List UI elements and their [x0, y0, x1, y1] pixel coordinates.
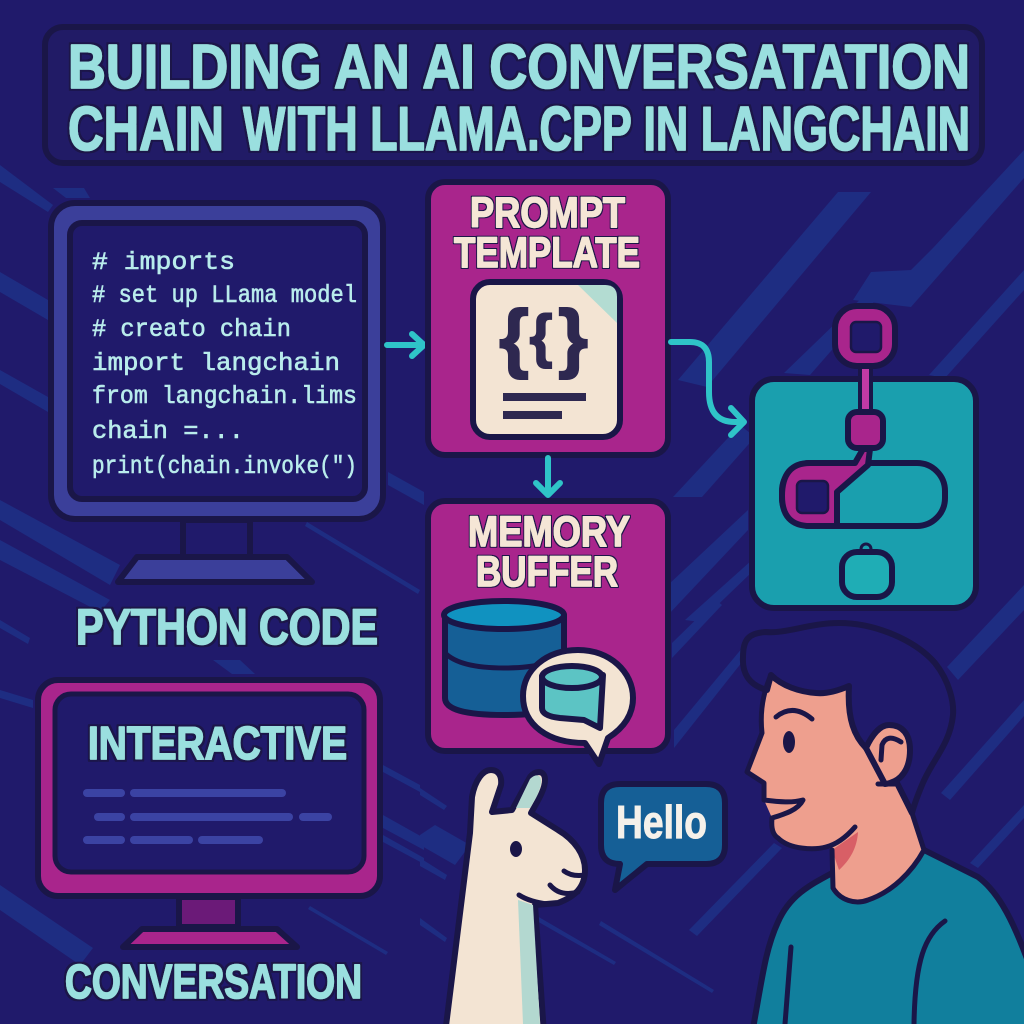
right ear — [516, 775, 541, 808]
code screen: # imports — [92, 248, 235, 277]
monitor stand — [118, 520, 312, 582]
label: conversation: CONVERSATION — [65, 956, 362, 1009]
monitor bezel — [51, 203, 383, 519]
hair — [743, 623, 953, 813]
speech bubble: hello — [601, 784, 725, 890]
face outline — [747, 675, 924, 902]
neck and face — [747, 675, 924, 902]
icon: template document — [473, 282, 620, 437]
heading: memory buffer — [468, 508, 630, 596]
chain node: small — [842, 544, 892, 597]
screen — [55, 694, 364, 872]
code screen: chain =... — [92, 417, 244, 446]
connector — [860, 366, 871, 412]
speech bubble: hello: Hello — [616, 796, 707, 848]
chain node: top — [835, 306, 895, 366]
screen: INTERACTIVE — [88, 717, 347, 769]
code screen: # set up LLama model — [92, 281, 357, 310]
panel: python code monitor — [51, 203, 383, 582]
ear detail — [878, 738, 901, 784]
arrow: code to prompt — [387, 334, 424, 356]
panel: memory buffer — [428, 501, 668, 764]
panel: interactive conversation monitor — [38, 680, 380, 947]
heading: memory buffer: MEMORY — [468, 508, 630, 556]
shirt folds — [785, 921, 945, 1024]
arrow: prompt to memory — [536, 458, 560, 495]
icon: template document: { — [530, 304, 552, 369]
heading: memory buffer: BUFFER — [476, 548, 618, 596]
code screen: print(chain.invoke(") — [92, 452, 357, 481]
ear — [866, 725, 910, 784]
code screen: import langchain — [92, 349, 340, 378]
heading: prompt template — [454, 189, 640, 277]
chain node: pill — [782, 449, 945, 526]
eye — [783, 731, 795, 753]
stand — [123, 897, 297, 947]
mouth — [519, 871, 585, 904]
bezel — [38, 680, 380, 896]
icon: template document: } — [558, 295, 588, 380]
code screen — [70, 223, 365, 499]
panel: chain diagram — [752, 306, 976, 608]
llama illustration — [445, 770, 585, 1024]
title banner — [45, 27, 982, 164]
arrow: prompt to chain — [671, 342, 744, 435]
panel: prompt template — [428, 182, 668, 455]
shirt — [752, 850, 1024, 1024]
neck shadow — [832, 832, 858, 870]
eye — [510, 841, 522, 857]
heading: prompt template: TEMPLATE — [454, 229, 640, 277]
eyebrow — [776, 710, 812, 719]
icon: database cylinder — [444, 601, 564, 715]
person illustration — [743, 623, 1024, 1024]
icon: chat bubble with cylinder — [523, 650, 633, 764]
title line 2: CHAIN — [68, 95, 224, 164]
icon: template document: { — [499, 295, 529, 380]
heading: prompt template: PROMPT — [470, 189, 625, 237]
chain node: middle — [848, 412, 883, 448]
code screen: from langchain.lims — [92, 382, 357, 411]
neck shadow — [518, 900, 540, 1024]
code screen: # creato chain — [92, 315, 291, 344]
label: python code: PYTHON CODE — [76, 599, 378, 655]
